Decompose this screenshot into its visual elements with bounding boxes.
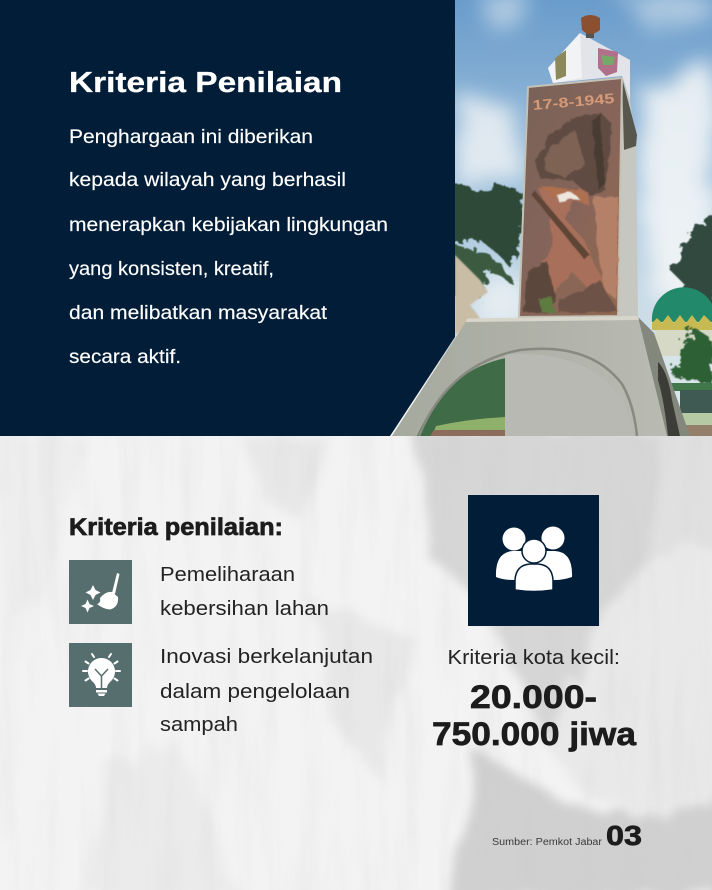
- arch edge: [419, 349, 637, 436]
- big number: population range: [432, 679, 636, 752]
- text: cleanliness: kebersihan lahan: [160, 597, 329, 620]
- tower top block: [548, 33, 630, 100]
- description text: menerapkan kebijakan lingkungan: [69, 214, 388, 236]
- source note: Sumber: Pemkot Jabar: [492, 837, 603, 848]
- heading: criteria list: Kriteria penilaian:: [69, 514, 283, 541]
- text: innovation: Inovasi berkelanjutan: [160, 645, 373, 668]
- photo: monument against the sky: [392, 0, 712, 436]
- description text: dan melibatkan masyarakat: [69, 302, 328, 324]
- right tree: [668, 212, 712, 306]
- arch pillar: [505, 354, 570, 436]
- text: innovation: dalam pengelolaan: [160, 680, 350, 703]
- text: cleanliness: [160, 563, 329, 620]
- monument base: [392, 316, 690, 436]
- relief figures: [523, 112, 618, 314]
- left tree: [450, 182, 525, 300]
- text: innovation: [160, 645, 373, 736]
- text: small city criteria label: Kriteria kota kecil:: [448, 646, 620, 669]
- description text: kepada wilayah yang berhasil: [69, 169, 346, 191]
- emblems: [598, 48, 618, 76]
- description text: yang konsisten, kreatif,: [69, 258, 274, 280]
- text: cleanliness: Pemeliharaan: [160, 563, 295, 586]
- green dome: [652, 287, 712, 436]
- panel: navy header: [0, 0, 455, 436]
- torch: [586, 33, 594, 38]
- big number: population range: 750.000 jiwa: [432, 716, 636, 752]
- icon: broom and sparkles: [69, 560, 132, 624]
- icon: light bulb: [69, 643, 132, 707]
- description text: secara aktif.: [69, 346, 181, 368]
- clouds: [455, 0, 712, 320]
- title: Kriteria Penilaian: [69, 67, 342, 99]
- sky: [440, 0, 712, 436]
- text: innovation: sampah: [160, 713, 238, 736]
- tower side: [618, 78, 638, 317]
- garden through arch: [417, 358, 506, 436]
- relief date: 17-8-1945: [532, 90, 615, 113]
- palm tree: [672, 328, 712, 385]
- big number: population range: 20.000-: [470, 679, 597, 715]
- description text: Penghargaan ini diberikan: [69, 126, 313, 148]
- background building: [455, 255, 488, 335]
- page number: 03: [606, 820, 642, 851]
- tower front relief: [519, 78, 622, 317]
- description text: [69, 126, 388, 368]
- icon: people group: [468, 495, 599, 626]
